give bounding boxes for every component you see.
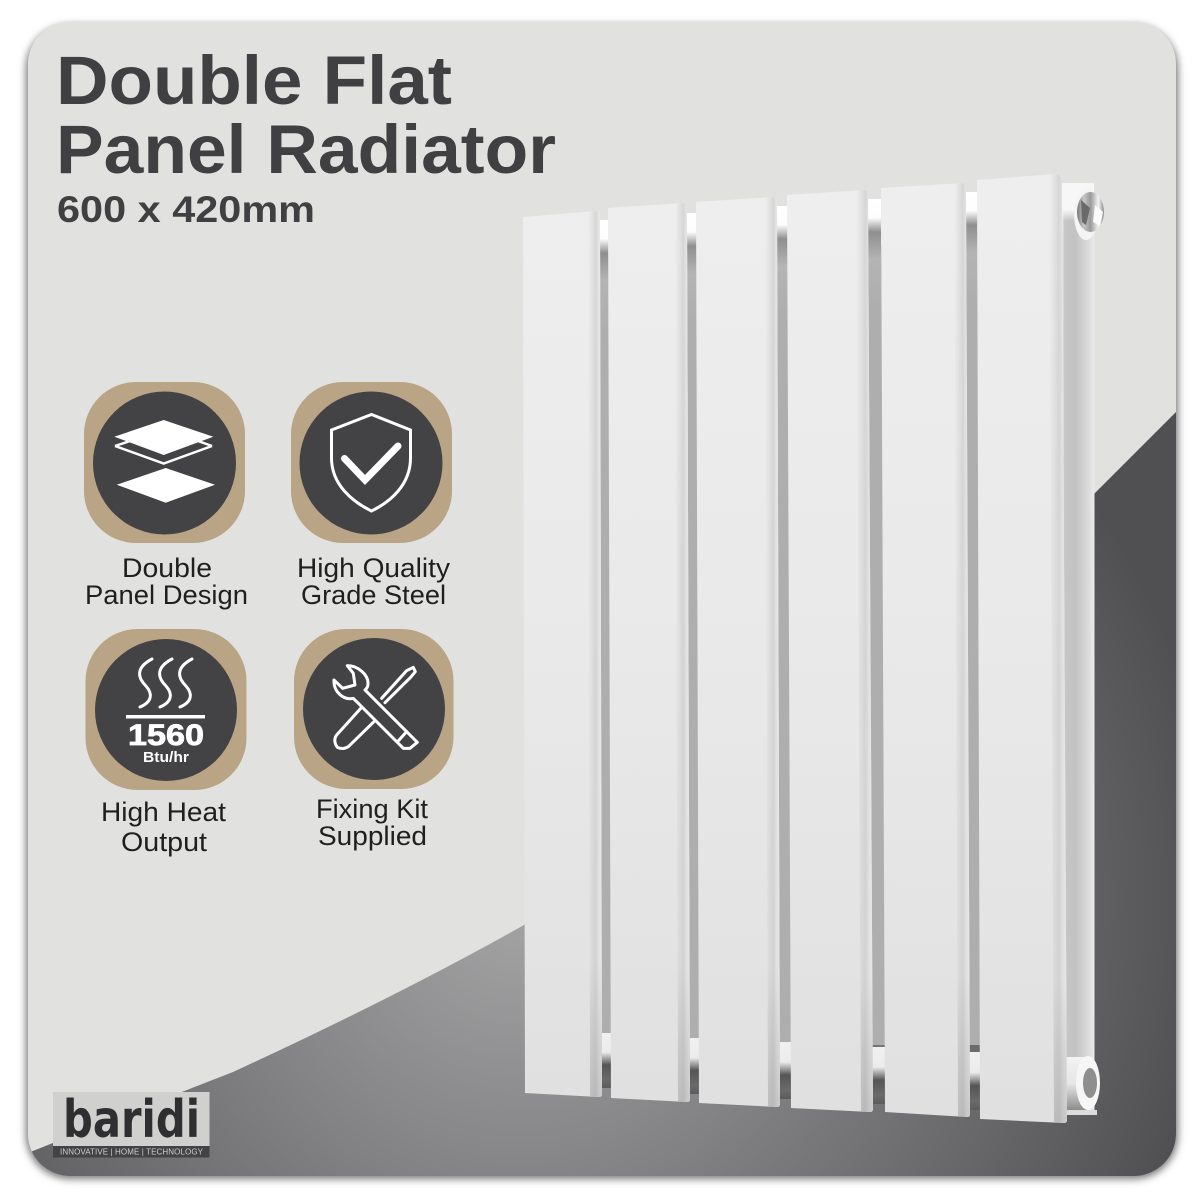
title: Double Flat <box>56 42 452 119</box>
radiator <box>523 174 1104 1123</box>
icon: wrench and screwdriver <box>294 629 454 789</box>
icon: heat waves 1560 Btu/hr: Btu/hr <box>143 749 189 766</box>
feature: high quality grade steel <box>291 382 452 610</box>
label: High Quality <box>297 553 451 583</box>
label <box>85 553 248 610</box>
label: Grade Steel <box>301 580 446 610</box>
feature: double panel design <box>84 382 248 610</box>
panel 3 <box>696 197 780 1107</box>
label <box>297 553 451 610</box>
label: Double <box>122 553 212 583</box>
icon: shield with check <box>291 382 452 543</box>
rear plate and rails <box>600 183 1097 1115</box>
icon: layered panels <box>84 382 245 543</box>
right back strip <box>1062 205 1094 1115</box>
icon: heat waves 1560 Btu/hr <box>86 629 246 790</box>
label: Output <box>121 827 208 857</box>
icon: heat waves 1560 Btu/hr: 1560 <box>128 719 204 752</box>
logo: baridi: INNOVATIVE | HOME | TECHNOLOGY <box>60 1148 204 1156</box>
dark diagonal background <box>28 412 1176 1176</box>
feature: fixing kit supplied <box>294 629 454 851</box>
logo: baridi: baridi <box>63 1090 200 1150</box>
label <box>316 794 428 851</box>
label: Fixing Kit <box>316 794 428 824</box>
title: Panel Radiator <box>56 111 556 188</box>
title <box>56 42 556 230</box>
label: Panel Design <box>85 580 248 610</box>
feature: high heat output <box>86 629 246 857</box>
label: High Heat <box>101 797 227 827</box>
panel 6 <box>977 174 1067 1123</box>
valve bolt <box>1074 188 1104 240</box>
panel 1 <box>523 211 602 1097</box>
subtitle: 600 x 420mm <box>57 189 315 230</box>
pipe connector ring <box>1076 1056 1100 1110</box>
label <box>101 797 227 857</box>
panel 2 <box>608 203 690 1102</box>
panel 5 <box>881 183 970 1117</box>
panel 4 <box>787 190 873 1112</box>
label: Supplied <box>318 821 427 851</box>
